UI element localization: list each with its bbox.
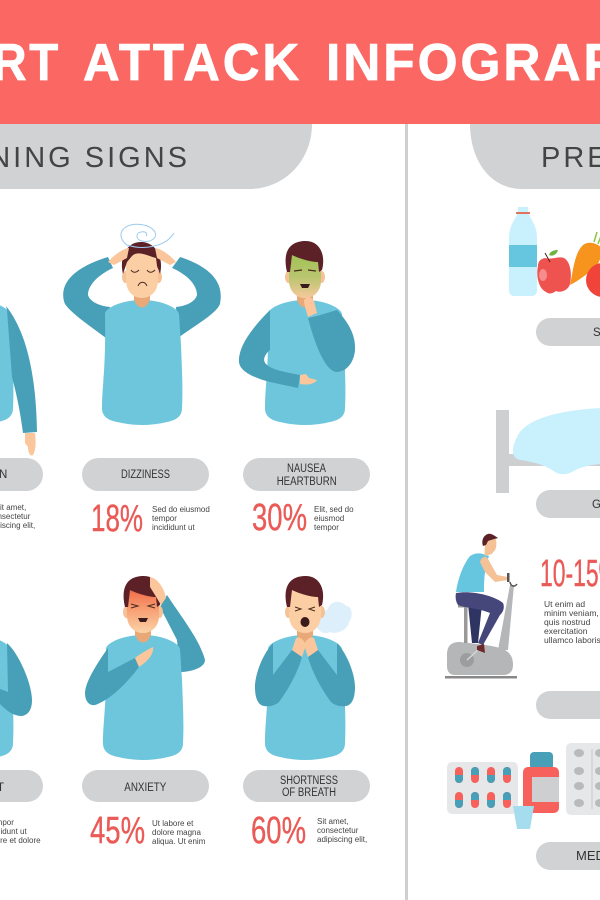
label: exercise	[536, 691, 600, 719]
description: quis nostrud	[544, 617, 591, 627]
label: dizziness	[82, 458, 209, 491]
label: anxiety	[82, 770, 209, 802]
description: Ut labore et	[152, 819, 194, 828]
stat: 45%: 45%	[90, 810, 145, 852]
label: nausea heartburn: NAUSEA	[287, 463, 326, 475]
figure: nauseous man	[239, 241, 355, 425]
symptom: arm pain	[0, 300, 43, 530]
stat: 60%: 60%	[251, 810, 306, 852]
symptom: shortness of breath	[243, 576, 370, 852]
prevention: sleep	[496, 408, 600, 518]
stat: 18%: 18%	[91, 498, 143, 540]
label: shortness of breath	[243, 770, 370, 802]
symptom: nausea heartburn	[239, 241, 370, 539]
figure: anxious man	[85, 576, 205, 760]
icon: water glass	[513, 806, 534, 829]
description: consectetur	[317, 826, 359, 835]
description: Ut enim ad	[544, 599, 585, 609]
description: tempor	[152, 514, 177, 523]
icon: tablet blister pack	[566, 743, 600, 815]
label: medication	[536, 842, 600, 870]
description: aliqua. Ut enim	[152, 837, 206, 846]
label: shortness of breath: SHORTNESS	[280, 775, 338, 787]
prevention: diet	[509, 207, 600, 346]
description: Sed do eiusmod	[152, 505, 210, 514]
icon: tomato	[586, 263, 600, 297]
prevention: exercise	[445, 534, 600, 719]
stat: 30%: 30%	[252, 497, 307, 539]
label: sweat	[0, 770, 43, 802]
description: dolore magna	[152, 828, 201, 837]
icon: medicine bottle	[523, 752, 559, 813]
description: ullamco laboris	[544, 635, 600, 645]
label: dizziness: DIZZINESS	[121, 469, 170, 481]
icon: water bottle	[509, 207, 537, 296]
label: nausea heartburn: HEARTBURN	[277, 476, 337, 488]
icon: carrot	[570, 232, 600, 285]
description: tempor	[314, 523, 339, 532]
heading: prevention	[470, 124, 600, 189]
figure: arm pain	[0, 300, 37, 455]
icon: bed	[496, 408, 600, 493]
description: minim veniam,	[544, 608, 599, 618]
figure: sweating man	[0, 635, 32, 760]
label: anxiety: ANXIETY	[124, 782, 167, 794]
description: eiusmod	[314, 514, 344, 523]
description: Elit, sed do	[314, 505, 354, 514]
icon: man on exercise bike	[445, 534, 517, 678]
prevention: medication	[447, 743, 600, 870]
icon: dizzy swirl	[121, 224, 174, 247]
label: diet	[536, 318, 600, 346]
column divider	[405, 124, 408, 900]
description: incididunt ut	[152, 523, 195, 532]
symptom: dizziness	[63, 224, 221, 540]
description: adipiscing elit,	[317, 835, 367, 844]
symptom: sweat	[0, 635, 43, 845]
icon: breath cloud	[315, 602, 352, 633]
symptom: anxiety	[82, 576, 209, 852]
title banner	[0, 0, 600, 124]
label: arm pain	[0, 458, 43, 491]
label: nausea heartburn	[243, 458, 370, 491]
icon: capsule blister pack	[447, 762, 518, 814]
title banner: ATTACK	[83, 34, 302, 92]
figure: dizzy man	[63, 224, 221, 425]
label: shortness of breath: OF BREATH	[282, 787, 336, 799]
label: sleep	[536, 490, 600, 518]
description: Sit amet,	[317, 817, 349, 826]
heading: warning signs	[0, 124, 312, 189]
figure: breathless man	[255, 576, 355, 760]
description: exercitation	[544, 626, 588, 636]
icon: apple	[537, 250, 571, 294]
